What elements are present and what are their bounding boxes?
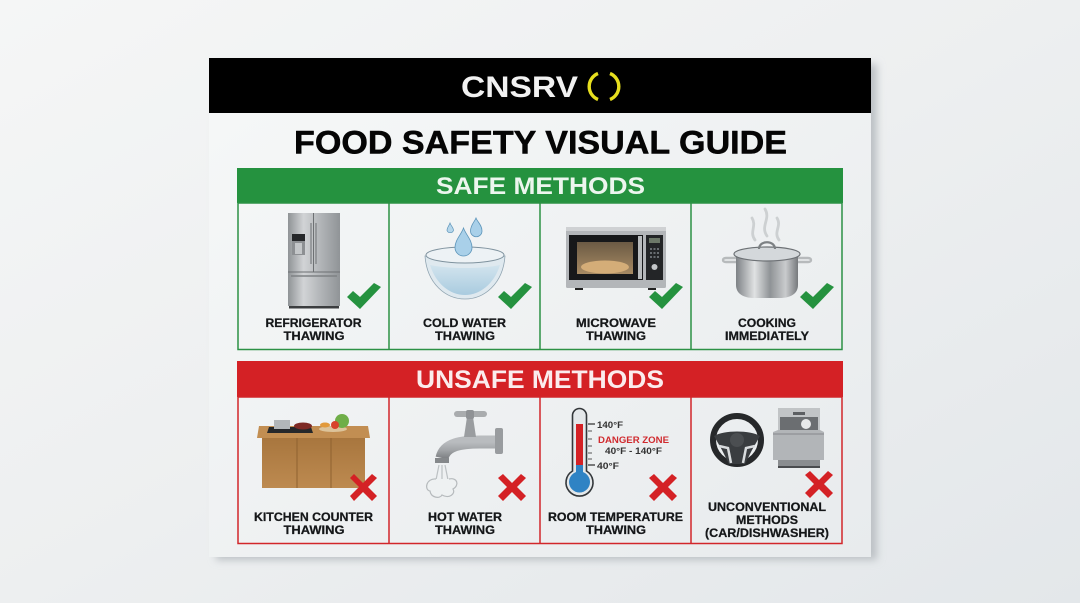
label	[725, 316, 809, 343]
label: IMMEDIATELY	[725, 329, 809, 343]
temperature labels: 40°F	[597, 461, 619, 472]
icon: check	[800, 283, 834, 309]
label: METHODS	[736, 513, 798, 527]
icon: steering wheel	[713, 416, 761, 464]
label: REFRIGERATOR	[266, 316, 362, 330]
card: unconventional methods	[705, 408, 833, 540]
icon: refrigerator	[288, 213, 340, 308]
card: cold water thawing	[423, 218, 532, 343]
temperature labels: DANGER ZONE	[598, 435, 669, 446]
logo: yellow brackets	[589, 74, 619, 100]
label: THAWING	[435, 523, 495, 537]
label: COOKING	[738, 316, 796, 330]
label: THAWING	[586, 329, 646, 343]
card: refrigerator thawing	[266, 213, 381, 343]
unsafe heading band	[237, 361, 843, 397]
label	[423, 316, 506, 343]
unsafe heading band: UNSAFE METHODS	[416, 366, 664, 394]
brand name: CNSRV	[461, 71, 578, 104]
icon: cross	[649, 474, 677, 501]
temperature labels: 140°F	[597, 420, 623, 431]
label: THAWING	[284, 523, 344, 537]
label	[548, 510, 683, 537]
icon: thermometer	[566, 409, 595, 496]
icon: water bowl	[425, 218, 505, 299]
safe heading band: SAFE METHODS	[436, 173, 645, 200]
label	[254, 510, 373, 537]
icon: check	[649, 283, 683, 309]
icon: kitchen counter	[257, 414, 370, 488]
card: hot water thawing	[427, 410, 526, 537]
icon: cross	[350, 474, 377, 501]
label	[266, 316, 362, 343]
poster shadow	[216, 64, 877, 560]
icon: cross	[805, 471, 833, 498]
label: UNCONVENTIONAL	[708, 500, 827, 514]
unsafe grid	[238, 397, 842, 544]
panel: unsafe methods	[237, 361, 843, 544]
label: MICROWAVE	[576, 316, 656, 330]
label: ROOM TEMPERATURE	[548, 510, 683, 524]
panel: safe methods	[237, 168, 843, 350]
icon: cross	[498, 474, 526, 501]
label: HOT WATER	[428, 510, 502, 524]
safe grid	[238, 203, 842, 350]
poster	[209, 58, 871, 557]
title: FOOD SAFETY VISUAL GUIDE	[294, 124, 787, 160]
icon: microwave	[566, 227, 666, 290]
temperature labels	[597, 420, 669, 472]
icon: faucet with steam	[427, 410, 503, 497]
label: THAWING	[586, 523, 646, 537]
label: THAWING	[284, 329, 344, 343]
safe heading band	[237, 168, 843, 203]
label: (CAR/DISHWASHER)	[705, 526, 829, 540]
label: KITCHEN COUNTER	[254, 510, 373, 524]
drops	[455, 228, 472, 256]
card: kitchen counter thawing	[254, 414, 377, 537]
label	[576, 316, 656, 343]
label: COLD WATER	[423, 316, 506, 330]
card: room temperature thawing	[548, 409, 683, 537]
icon: steaming pot	[723, 209, 811, 298]
card: cooking immediately	[723, 209, 834, 343]
icon: check	[498, 283, 532, 309]
card: microwave thawing	[566, 227, 683, 343]
header bar	[209, 58, 871, 113]
icon: dishwasher	[773, 408, 824, 468]
label	[705, 500, 829, 540]
temperature labels: 40°F - 140°F	[605, 446, 662, 457]
icon: check	[347, 283, 381, 309]
label: THAWING	[435, 329, 495, 343]
label	[428, 510, 502, 537]
